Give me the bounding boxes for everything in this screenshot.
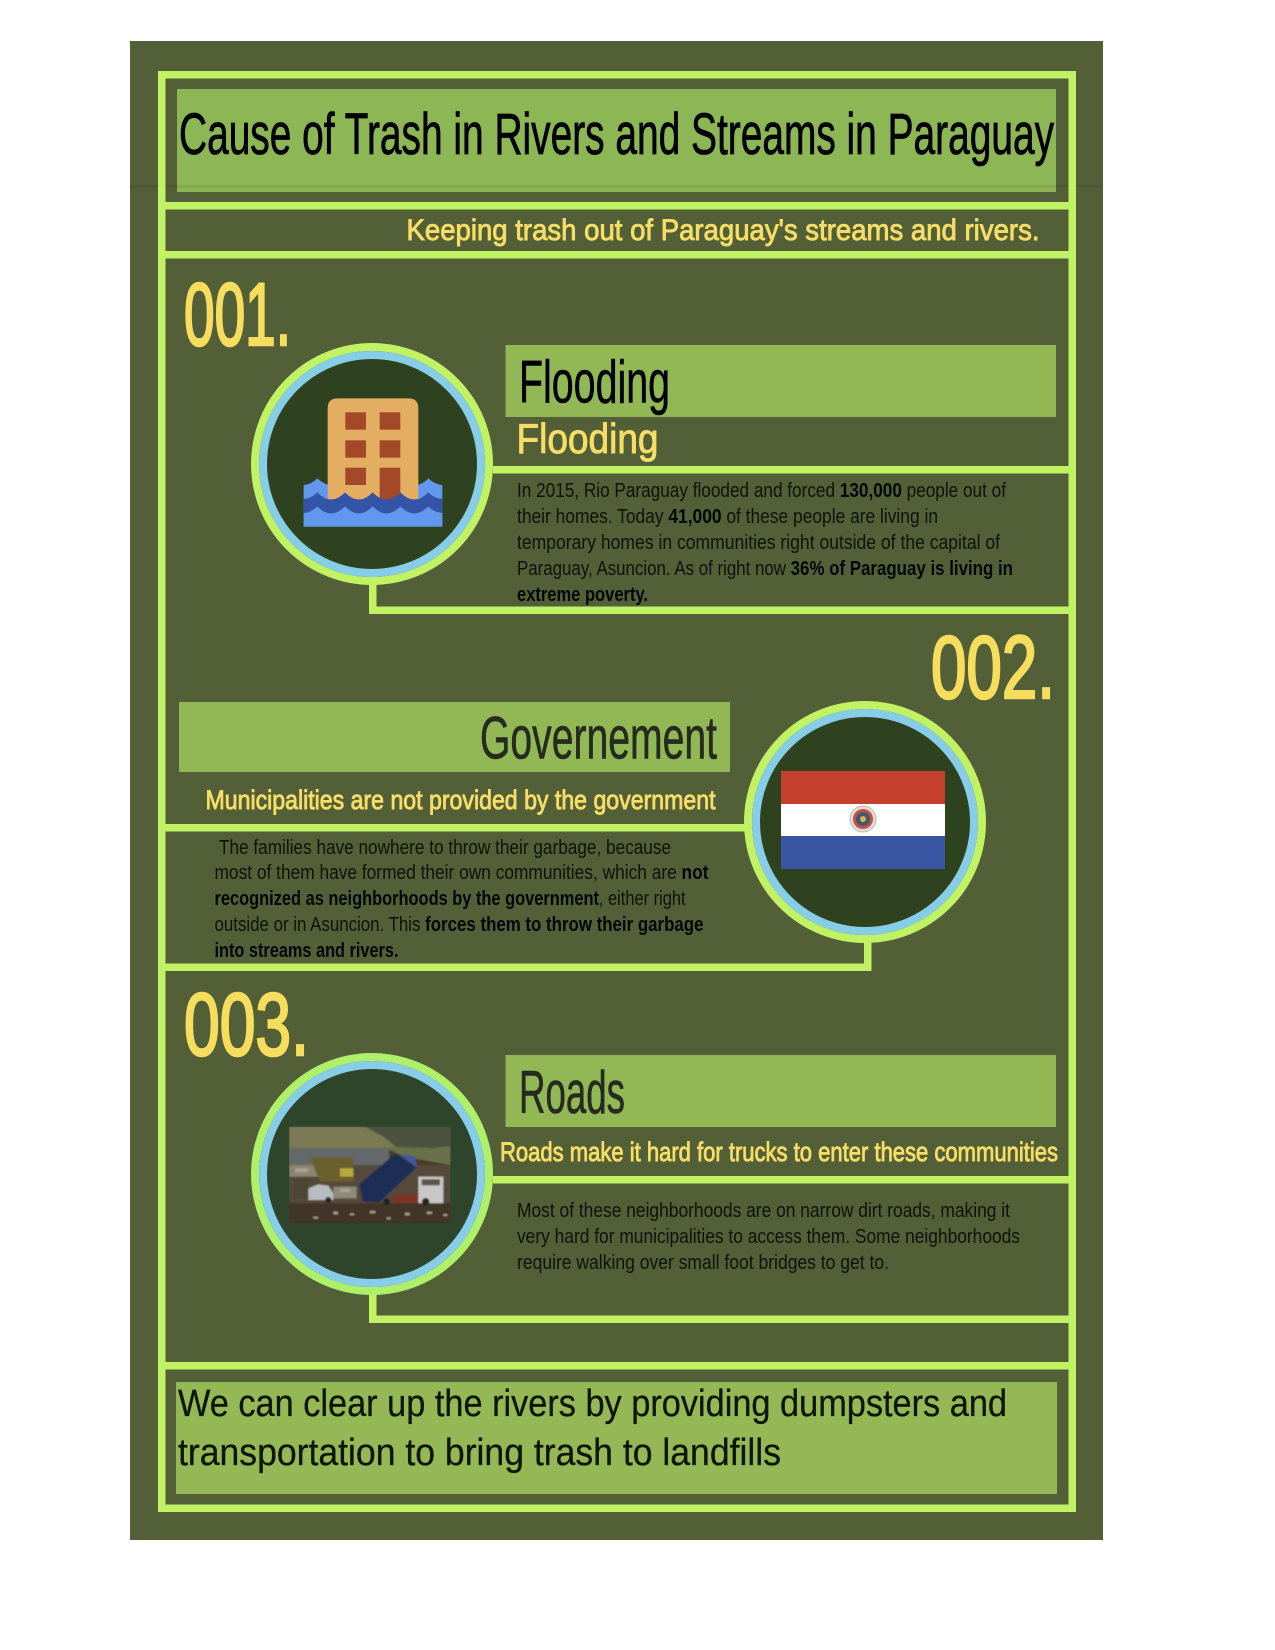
- body text: flooding: Paraguay, Asuncion. As of right now 36% of Paraguay is living in: [517, 558, 1013, 580]
- circle icon: flooded building: [255, 347, 489, 581]
- number 002: 002.: [931, 617, 1055, 717]
- circle icon: Paraguay flag: [748, 705, 982, 939]
- panel: flooding: [184, 264, 1056, 606]
- body text: flooding: In 2015, Rio Paraguay flooded and forced 130,000 people out of: [517, 480, 1006, 502]
- subheading: municipalities: Municipalities are not provided by the government: [206, 785, 716, 815]
- body text: government: The families have nowhere to throw their garbage, because: [219, 837, 671, 859]
- heading bar: Governement: Governement: [480, 704, 717, 772]
- body text: flooding: extreme poverty.: [517, 584, 648, 606]
- background panel: [130, 41, 1103, 1540]
- conclusion banner: [176, 1382, 1057, 1494]
- body text: government: [214, 837, 709, 962]
- heading bar: Flooding: [506, 345, 1056, 417]
- heading bar: Governement: [179, 702, 730, 772]
- body text: roads: [517, 1200, 1020, 1274]
- number 003: 003.: [184, 974, 309, 1074]
- body text: government: outside or in Asuncion. This forces them to throw their garbage: [214, 914, 704, 936]
- body text: roads: Most of these neighborhoods are on narrow dirt roads, making it: [517, 1200, 1010, 1222]
- outer frame and dividers: [158, 71, 1076, 1512]
- subheading: Flooding: Flooding: [516, 415, 658, 462]
- panel: roads: [184, 974, 1058, 1291]
- body text: flooding: temporary homes in communities right outside of the capital of: [517, 532, 1000, 554]
- conclusion banner: We can clear up the rivers by providing dumpsters and: [178, 1383, 1007, 1425]
- body text: flooding: [517, 480, 1013, 606]
- conclusion banner: transportation to bring trash to landfills: [178, 1432, 781, 1474]
- body text: government: into streams and rivers.: [214, 940, 398, 962]
- heading bar: Flooding: Flooding: [519, 348, 670, 416]
- panel: government: [179, 617, 1055, 962]
- subheading: roads: Roads make it hard for trucks to enter these communities: [500, 1137, 1058, 1167]
- circle icon: landfill photo: [255, 1057, 489, 1291]
- body text: roads: very hard for municipalities to access them. Some neighborhoods: [517, 1226, 1020, 1248]
- heading bar: Roads: [506, 1055, 1056, 1127]
- subtitle: Keeping trash out of Paraguay's streams and rivers.: [406, 214, 1040, 247]
- body text: roads: require walking over small foot bridges to get to.: [517, 1252, 889, 1274]
- body text: government: recognized as neighborhoods by the government, either right: [214, 888, 686, 910]
- heading bar: Roads: Roads: [519, 1059, 625, 1126]
- body text: flooding: their homes. Today 41,000 of these people are living in: [517, 506, 938, 528]
- title banner: [177, 89, 1056, 192]
- body text: government: most of them have formed their own communities, which are not: [214, 862, 709, 884]
- number 001: 001.: [184, 264, 291, 364]
